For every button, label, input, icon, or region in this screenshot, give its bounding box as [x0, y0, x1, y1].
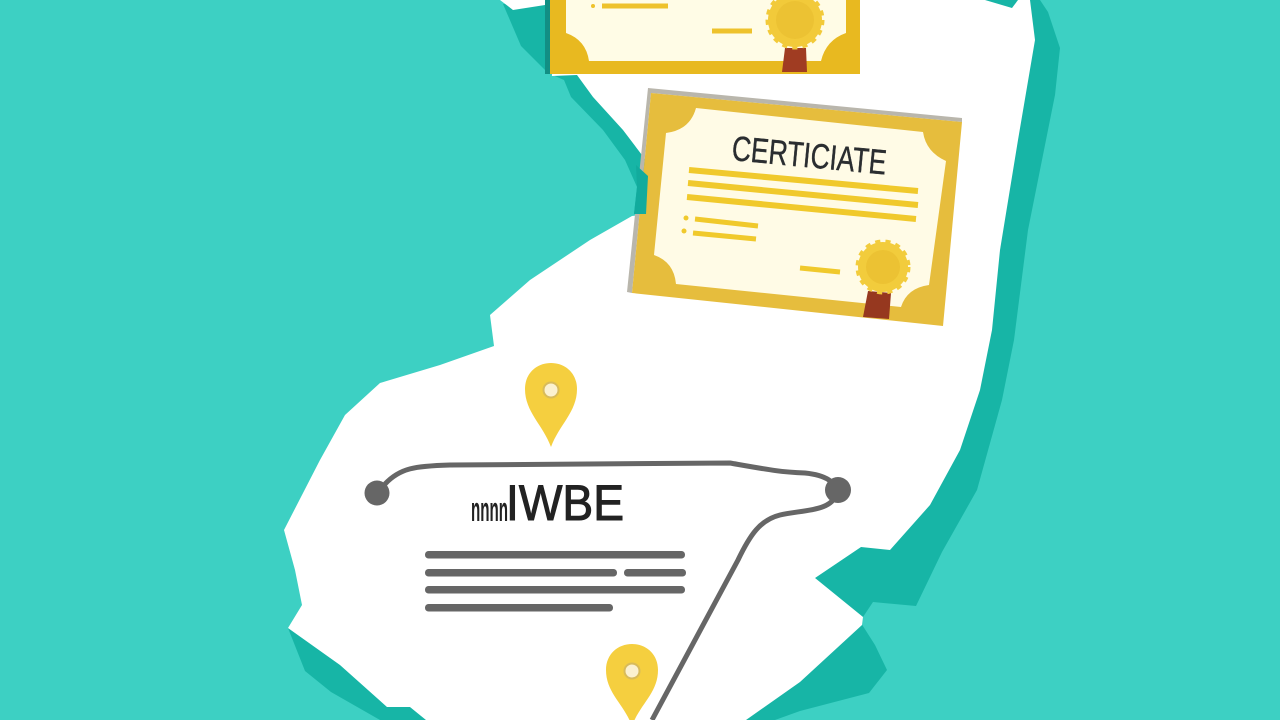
label text	[471, 475, 624, 531]
pin body	[525, 363, 577, 447]
ribbon	[863, 291, 891, 319]
certificate edge	[545, 0, 551, 74]
ribbon	[782, 48, 807, 72]
certificate title: CERTICIATE	[730, 129, 888, 183]
map pin: upper	[525, 363, 577, 447]
coast overlap on certificate edge	[634, 165, 648, 214]
certificate text lines	[687, 170, 918, 272]
certificate frame	[550, 0, 860, 74]
shadow: bottom left	[288, 628, 426, 720]
certificate frame	[632, 93, 962, 326]
label word: IWBE	[506, 475, 624, 531]
seal	[768, 0, 822, 47]
route start dot	[364, 480, 390, 506]
bullet	[591, 4, 595, 8]
shadow: right coast	[815, 0, 1060, 617]
map landmass	[284, 0, 1035, 720]
map shadow	[288, 0, 1060, 720]
certificate: top	[545, 0, 860, 74]
certificate paper	[566, 0, 846, 61]
small coast piece, top right	[985, 0, 1018, 8]
text lines	[425, 551, 686, 612]
label text: nnnn	[471, 491, 508, 529]
route path	[385, 463, 836, 720]
certificate: main	[627, 88, 962, 326]
route line	[364, 463, 851, 720]
certificate text lines	[602, 6, 752, 31]
certificate edge	[627, 88, 962, 293]
map pin: lower	[606, 644, 658, 720]
seal	[858, 242, 908, 292]
shadow: top left	[503, 0, 660, 216]
pin body	[606, 644, 658, 720]
certificate paper	[654, 108, 946, 307]
shadow: bottom right	[740, 623, 887, 720]
pin hole	[624, 664, 640, 678]
pin hole	[544, 382, 558, 398]
bullets	[682, 216, 688, 234]
route end dot	[825, 477, 851, 503]
